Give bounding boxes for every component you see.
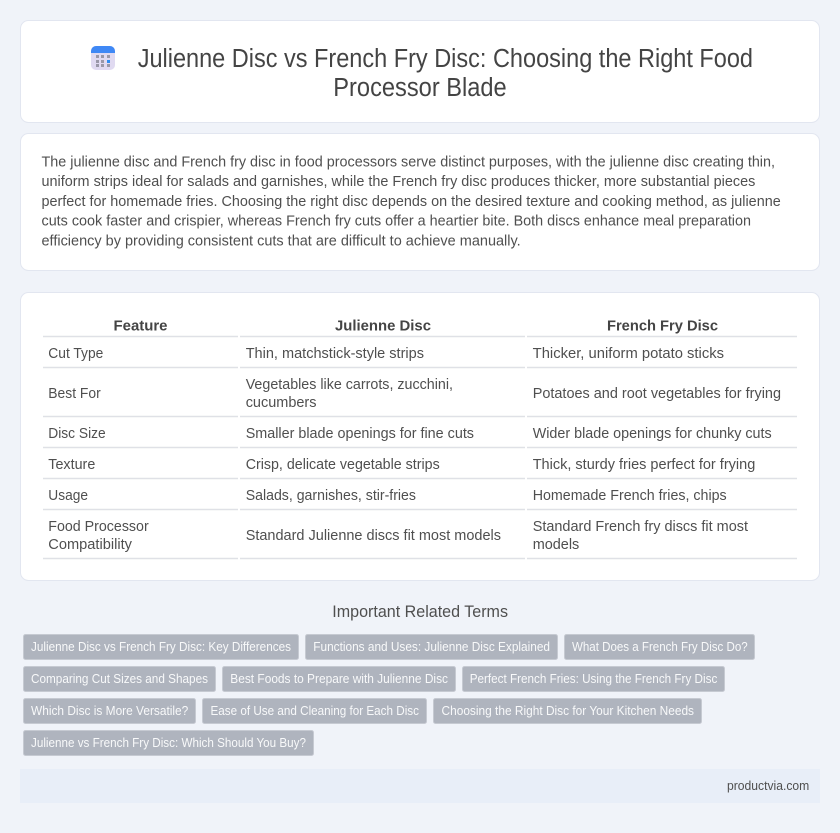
table header row: Feature [114,318,168,334]
tag [462,666,724,692]
tag [24,666,216,692]
footer [20,769,820,803]
tag [24,730,314,756]
table row: compatibility: Compatibility [48,537,133,553]
tag [306,634,558,660]
table header row [114,318,718,334]
tag: Functions and Uses: Julienne Disc Explained [313,640,550,654]
table row: cut type: Thicker, uniform potato sticks [533,346,724,362]
table header row: French Fry Disc [607,318,718,334]
table row: compatibility [48,519,748,553]
table row: disc size: Wider blade openings for chunky cuts [533,426,772,442]
tag [434,698,702,724]
table row: usage: Homemade French fries, chips [533,488,727,504]
table row: disc size [48,426,772,442]
tag: Julienne vs French Fry Disc: Which Should You Buy? [31,736,306,750]
table row: best for: Potatoes and root vegetables for frying [533,386,781,402]
tag: What Does a French Fry Disc Do? [572,640,748,654]
tag: Comparing Cut Sizes and Shapes [31,672,208,686]
tag: Best Foods to Prepare with Julienne Disc [230,672,448,686]
table row: compatibility: models [533,537,579,553]
table row: best for: Best For [48,386,101,402]
tag: Which Disc is More Versatile? [31,704,188,718]
table row: usage: Usage [48,488,88,504]
table row: texture: Crisp, delicate vegetable strips [246,457,440,473]
footer source text: productvia.com [727,778,809,793]
text block: summary paragraph: uniform strips ideal for salads and garnishes, while the French fry disc produces thicker, more substantial pieces [42,174,755,190]
tag [222,666,456,692]
tag [24,634,298,660]
table header row: Julienne Disc [335,318,431,334]
table row: usage [48,488,727,504]
tag [564,634,754,660]
text block: summary paragraph: perfect for homemade fries. Choosing the right disc depends on the desired texture and cooking method, as julienne [42,194,781,210]
title: Julienne Disc vs French Fry Disc: Choosing the Right Food [138,45,753,73]
table row: cut type [48,346,724,362]
title: Processor Blade [333,74,507,102]
text block: summary paragraph [42,154,781,250]
table row: texture [48,457,755,473]
table row: disc size: Disc Size [48,426,106,442]
header panel [20,20,820,122]
title [138,45,753,102]
text block: summary paragraph: The julienne disc and French fry disc in food processors serve distinct purposes, with the julienne disc creating thin, [42,154,775,170]
table row: best for [48,377,781,411]
table row: best for: Vegetables like carrots, zucchini, [246,377,453,393]
table row: texture: Texture [48,457,95,473]
text block: summary paragraph: efficiency by providing consistent cuts that are difficult to achieve manually. [42,234,521,250]
tag [202,698,426,724]
tag [24,698,196,724]
text block: summary paragraph: cuts cook faster and crispier, whereas French fry cuts offer a heartier bite. Both discs enhance meal preparation [42,214,751,230]
tag: Ease of Use and Cleaning for Each Disc [210,704,419,718]
tag: Julienne Disc vs French Fry Disc: Key Differences [31,640,291,654]
table row: compatibility: Standard French fry discs fit most [533,519,748,535]
tag: Choosing the Right Disc for Your Kitchen Needs [442,704,694,718]
tag group: related terms [24,634,754,756]
heading: important related terms: Important Related Terms [332,603,508,621]
table row: disc size: Smaller blade openings for fine cuts [246,426,474,442]
tag: Perfect French Fries: Using the French Fry Disc [470,672,717,686]
table row: best for: cucumbers [246,395,316,411]
icon: calendar [91,46,115,70]
table row: texture: Thick, sturdy fries perfect for frying [533,457,755,473]
table row: cut type: Thin, matchstick-style strips [246,346,424,362]
table row: compatibility: Food Processor [48,519,149,535]
table row: compatibility: Standard Julienne discs fit most models [246,528,501,544]
panel: comparison table [20,292,820,580]
table row: cut type: Cut Type [48,346,103,362]
table row: usage: Salads, garnishes, stir-fries [246,488,416,504]
panel: summary text [20,134,820,270]
